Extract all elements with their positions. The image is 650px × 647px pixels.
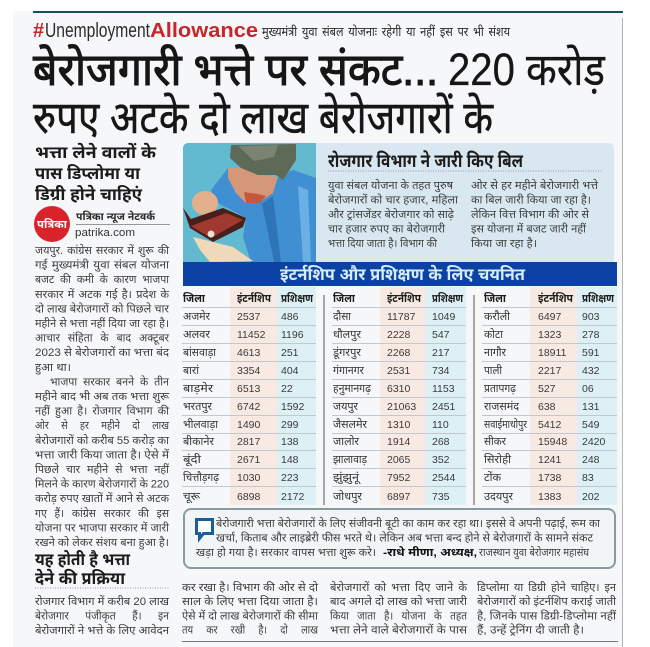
table: districts three	[484, 292, 615, 503]
table: districts two: 11787	[387, 311, 416, 323]
table: districts one: 1490	[237, 419, 261, 431]
table: districts three: पाली	[484, 364, 502, 377]
table: districts one: जिला	[183, 292, 206, 305]
table: districts three: 202	[582, 491, 600, 503]
table: districts three: 1241	[538, 454, 562, 466]
column shading	[230, 287, 617, 505]
table: districts three: सिरोही	[484, 453, 511, 466]
table: districts three: कोटा	[484, 328, 503, 341]
table: districts two: झुंझुनूं	[333, 471, 361, 485]
table: districts three: 591	[582, 347, 600, 359]
text block: left column story: 2023 से बेरोजगारों का भत्ता बंद	[35, 346, 169, 359]
table: districts one: 2172	[281, 491, 305, 503]
table: districts three: 2217	[538, 365, 562, 377]
text: quote: -राधे मीणा, अध्यक्ष,	[383, 545, 477, 559]
text block: left column story: आचार संहिता के बाद अक्टूबर	[35, 332, 169, 346]
text block: left column story: सरकार में अटक गई है। प्रदेश के	[35, 288, 170, 301]
table: districts one: 138	[281, 436, 299, 448]
subheading: diploma or degree: डिग्री होने चाहिएं	[35, 184, 143, 204]
text block: left column story: जयपुर. कांग्रेस सरकार में शुरू की	[35, 244, 169, 257]
table: districts two: 2531	[387, 365, 411, 377]
table: districts two: 1914	[387, 436, 411, 448]
table: districts one: 299	[281, 419, 299, 431]
table: districts three: करौली	[484, 310, 510, 323]
table: districts three: उदयपुर	[484, 491, 513, 503]
text block: left column story: गई मुख्यमंत्री युवा संबल योजना	[35, 259, 169, 272]
text block: bottom column two: किया जाता है। योजना के तहत	[330, 610, 468, 622]
table: districts three: 2420	[582, 436, 606, 448]
text block: left column story: महीने से भत्ता नहीं दिया जा रहा है।	[35, 317, 169, 330]
text block: left column story: करोड़ रुपए खातों में आने से अटक	[35, 492, 170, 505]
text block: process start: बेरोजगार पंजीकृत हैं। इन	[35, 610, 170, 622]
table: districts three: जिला	[484, 292, 507, 305]
table: districts two: 268	[432, 436, 450, 448]
table: districts two: इंटर्नशिप	[387, 292, 421, 305]
text block: left column story: बेरोजगारों को करीब 55 करोड़ का	[35, 434, 169, 447]
table: districts two: 6310	[387, 383, 411, 395]
table: districts two: 352	[432, 454, 450, 466]
subheading: process	[35, 548, 131, 588]
table: districts two: 217	[432, 347, 450, 359]
table: districts one: बूंदी	[183, 453, 201, 467]
text: bills column one: युवा संबल योजना के तहत पुरुष	[328, 179, 454, 192]
text: bills column two: ओर से हर महीने बेरोजगारी भत्ते	[471, 179, 598, 192]
table: districts two: जयपुर	[333, 401, 358, 413]
headline: 220 करोड़	[448, 44, 606, 95]
table: districts two: 547	[432, 329, 450, 341]
text block: bottom column two	[330, 581, 468, 636]
table: districts one: 6513	[237, 383, 261, 395]
subheading: diploma or degree: पास डिप्लोमा या	[35, 163, 141, 183]
table: districts two: 6897	[387, 491, 411, 503]
table: districts three: 83	[582, 472, 594, 484]
table: districts one: 11452	[237, 329, 266, 341]
headline: रुपए अटके दो लाख बेरोजगारों के	[33, 92, 494, 143]
table: districts one: बांसवाड़ा	[183, 346, 216, 359]
table: districts two: 7952	[387, 472, 411, 484]
subheading: diploma or degree	[35, 142, 157, 204]
table: districts three: सीकर	[484, 435, 506, 448]
icon: patrika logo: पत्रिका	[37, 218, 68, 231]
text block: bottom column one: साल के लिए भत्ता दिया जाता है।	[182, 595, 318, 608]
icon: patrika logo	[34, 206, 70, 242]
table: districts three: 18911	[538, 347, 567, 359]
illustration: man looking into empty wallet	[183, 143, 316, 262]
subheading: process: देने की प्रक्रिया	[35, 568, 126, 588]
text block: bottom column two: भत्ता लेने वाले बेरोजगारों के पास	[330, 624, 468, 636]
table: districts two: 2544	[432, 472, 456, 484]
table: districts two	[332, 292, 464, 503]
banner: selected for internship and training	[183, 262, 617, 286]
tagline: #	[33, 20, 44, 42]
text block: process start: रोजगार विभाग में करीब 20 लाख	[35, 595, 170, 608]
headline	[33, 44, 606, 143]
table: districts one: 2817	[237, 436, 261, 448]
text block: bottom column one: कर रखा है। विभाग की ओर से दो	[182, 581, 318, 594]
text: bills column one: भत्ता दिया जाता है। विभाग की	[328, 237, 437, 250]
table: districts one: इंटर्नशिप	[237, 292, 271, 305]
table: districts two: धौलपुर	[333, 328, 361, 341]
table: districts one: बीकानेर	[183, 435, 215, 448]
table: districts two: 734	[432, 365, 450, 377]
table: districts one: 1030	[237, 472, 261, 484]
text block: left column story: बजट की कमी के कारण भाजपा	[35, 273, 169, 286]
table: districts two: दौसा	[333, 310, 351, 323]
text block: bottom column three: है, जिनके पास डिग्री-डिप्लोमा नहीं	[477, 610, 616, 622]
table: districts one: 148	[281, 454, 299, 466]
table: districts two: 21063	[387, 401, 416, 413]
table: districts two: प्रशिक्षण	[432, 292, 464, 305]
text: bills column two: इस योजना में बजट जारी नहीं	[471, 222, 586, 236]
table: districts one: 1592	[281, 401, 305, 413]
table: districts one: 2671	[237, 454, 261, 466]
table: districts three: इंटर्नशिप	[538, 292, 573, 305]
table: districts one: अलवर	[183, 329, 211, 341]
panel: employment department bills	[183, 143, 614, 265]
table: districts one: 4613	[237, 347, 261, 359]
callout: quote box	[184, 509, 615, 568]
table: districts three: 248	[582, 454, 600, 466]
text block: left column story: भत्ता जारी किया जाता है। ऐसे में	[35, 448, 169, 461]
text: bills column two: का बिल जारी किया जा रहा है।	[471, 194, 591, 206]
table: districts one	[183, 292, 314, 504]
table: districts two: गंगानगर	[333, 364, 364, 377]
text block: bottom column three: डिप्लोमा या डिग्री होने चाहिए। इन	[477, 581, 617, 594]
table: districts one: बारां	[183, 364, 199, 377]
text block: bottom column three: बेरोजगारों को इंटर्नशिप कराई जाती	[477, 595, 616, 608]
table: districts two: 2228	[387, 329, 411, 341]
text: bills column two	[471, 179, 598, 250]
text block: bottom column one: तय कर रखी है। दो लाख	[182, 624, 319, 636]
table: districts three: राजसमंद	[484, 400, 519, 413]
text block: left column story: पिछले चार महीने से भत्ता नहीं	[35, 463, 169, 476]
table: districts two: झालावाड़	[333, 454, 367, 466]
table: districts one: 6742	[237, 401, 261, 413]
table: districts three: प्रतापगढ़	[484, 383, 517, 395]
table: districts two: 1049	[432, 311, 456, 323]
text block: bottom column two: बेरोजगारों को भत्ता दिए जाने के	[330, 581, 468, 594]
table: districts one: चित्तौड़गढ़	[183, 471, 220, 484]
subheading: process: यह होती है भत्ता	[35, 548, 131, 569]
tagline: Unemployment	[45, 20, 150, 42]
text block: left column story	[35, 244, 170, 550]
text block: left column story: नहीं हुआ है। रोजगार विभाग की	[35, 405, 169, 419]
table: districts one: 22	[281, 383, 293, 395]
text: quote: बेरोजगारी भत्ता बेरोजगारों के लिए संजीवनी बूटी का काम कर रहा था। इससे वे अपनी पढ़ाई, रूम का	[216, 517, 600, 531]
table: districts two: 2065	[387, 454, 411, 466]
table: districts three: टोंक	[484, 471, 502, 484]
table: districts three: 15948	[538, 436, 567, 448]
byline: patrika.com	[75, 227, 135, 239]
text block: left column story: भाजपा सरकार बनने के तीन	[50, 375, 170, 388]
text: bills column two: किया जा रहा है।	[471, 237, 537, 250]
table: districts two: 735	[432, 491, 450, 503]
tagline: मुख्यमंत्री युवा संबल योजनाः रहेगी या नहीं इस पर भी संशय	[262, 24, 510, 40]
tagline: Allowance	[150, 20, 258, 42]
text block: bottom column three	[477, 581, 617, 636]
table: districts one: प्रशिक्षण	[281, 292, 314, 305]
text: bills column one: बेरोजगारों को चार हजार, महिला	[328, 194, 458, 206]
byline: पत्रिका न्यूज नेटवर्क	[76, 209, 155, 224]
table: districts three: 638	[538, 401, 556, 413]
table: districts one: चूरू	[183, 491, 200, 504]
table: districts three: सवाईमाधोपुर	[484, 418, 527, 431]
table: districts two: 110	[432, 419, 449, 431]
text block: left column story: रखने को लेकर संशय बना हुआ है।	[35, 536, 169, 550]
text block: process start: बेरोजगारों ने भत्ते के लिए आवेदन	[35, 624, 170, 637]
text: quote: खर्चा, किताब और लाइब्रेरी फीस भरते थे। लेकिन अब भत्ता बन्द होने से बेरोजगारों के सामने संकट	[216, 532, 593, 544]
text block: bottom column three: हैं, उन्हें ट्रेनिंग दी जाती है।	[477, 624, 584, 636]
table: districts two: 1310	[387, 419, 411, 431]
table: districts three: 5412	[538, 419, 562, 431]
table: districts three: 549	[582, 419, 600, 431]
table: districts two: डूंगरपुर	[332, 346, 362, 360]
table: districts one: भीलवाड़ा	[183, 418, 218, 431]
table: districts one: 251	[281, 347, 299, 359]
text block: left column story: दो लाख बेरोजगारों को पिछले चार	[35, 302, 170, 315]
text block: left column story: योजना पर भाजपा सरकार में जारी	[35, 521, 169, 534]
byline	[75, 209, 170, 239]
table: districts three: नागौर	[484, 346, 506, 359]
text: quote: राजस्थान युवा बेरोजगार महासंघ	[479, 546, 589, 559]
text block: process start	[35, 595, 170, 637]
text: quote: खड़ा हो गया है। सरकार वापस भत्ता शुरू करे।	[196, 546, 376, 559]
table: districts two: 2451	[432, 401, 456, 413]
table: districts one: 223	[281, 472, 299, 484]
table: districts two: जिला	[333, 292, 356, 305]
table: districts one: 1196	[281, 329, 304, 341]
table: districts two: जैसलमेर	[333, 418, 367, 431]
text block: bottom column one	[182, 581, 319, 636]
text: bills column two: लेकिन वित्त विभाग की ओर से	[471, 208, 590, 221]
text: bills column one: और ट्रांसजेंडर बेरोजगार को साढ़े	[328, 208, 455, 221]
table: districts one: 2537	[237, 311, 261, 323]
text block: left column story: महीने बाद भी अब तक भत्ता शुरू	[35, 390, 169, 403]
table: districts three: 1738	[538, 472, 562, 484]
text: bills column one: चार हजार रुपए का बेरोजगारी	[328, 222, 445, 236]
table: districts three: 1323	[538, 329, 562, 341]
table: districts one: बाड़मेर	[183, 382, 214, 395]
table: districts one: 486	[281, 311, 299, 323]
text: bills column one	[328, 179, 458, 250]
table: districts two: 2268	[387, 347, 411, 359]
icon: speech bubble quote mark	[196, 520, 212, 538]
table: districts three: 1383	[538, 491, 562, 503]
subheading: diploma or degree: भत्ता लेने वालों के	[35, 142, 157, 162]
table: districts one: अजमेर	[183, 310, 210, 323]
table: districts three: 432	[582, 365, 600, 377]
table: districts one: 3354	[237, 365, 261, 377]
table: districts three: 278	[582, 329, 600, 341]
text block: bottom column two: बाद अगले दो लाख को भत्ता जारी	[330, 595, 467, 608]
text block: left column story: मिलने के कारण बेरोजगारों के 220	[35, 478, 169, 491]
text block: left column story: गए हैं। कांग्रेस सरकार की इस	[35, 507, 170, 520]
table: districts three: 6497	[538, 311, 562, 323]
text: quote	[196, 517, 600, 559]
text block: bottom column one: ऐसे में दो लाख बेरोजगारों की सीमा	[182, 610, 318, 622]
banner: selected for internship and training: इंटर्नशिप और प्रशिक्षण के लिए चयनित	[280, 264, 525, 284]
text block: left column story: हुआ था।	[35, 362, 71, 375]
table: districts three: प्रशिक्षण	[582, 292, 615, 305]
headline: बेरोजगारी भत्ते पर संकट...	[33, 44, 438, 95]
text block: left column story: ओर से हर महीने दो लाख	[35, 419, 170, 432]
table: districts three: 527	[538, 383, 556, 395]
table: districts two: जोधपुर	[333, 490, 363, 503]
tagline	[33, 20, 510, 42]
table: districts one: भरतपुर	[183, 401, 212, 413]
table: districts one: 404	[281, 365, 299, 377]
table: districts three: 903	[582, 311, 600, 323]
table: districts three: 06	[582, 383, 594, 395]
heading: bills issued: रोजगार विभाग ने जारी किए बिल	[328, 151, 524, 171]
table: districts two: हनुमानगढ़	[333, 383, 372, 395]
table: districts three: 131	[582, 401, 600, 413]
table: districts two: जालोर	[333, 435, 359, 448]
table: districts two: 1153	[432, 383, 455, 395]
table: districts one: 6898	[237, 491, 261, 503]
